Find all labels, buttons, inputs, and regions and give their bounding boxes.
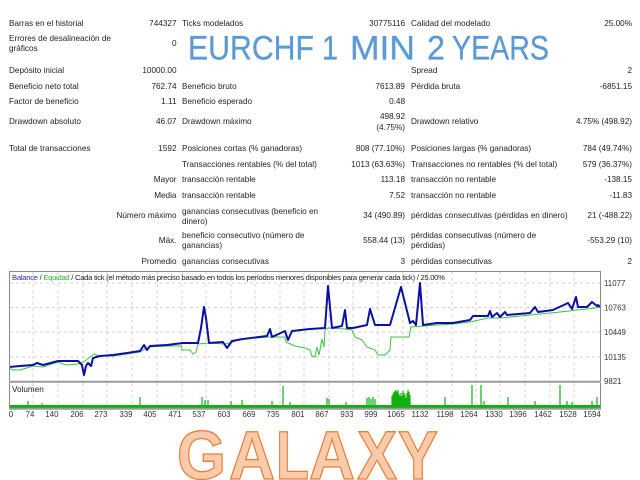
trade count axis: 1132: [412, 410, 428, 419]
price axis: 9821: [604, 377, 622, 386]
balance line: [9, 283, 600, 375]
trade count axis: 603: [217, 410, 231, 419]
row: largest trade: 113.18: [381, 175, 405, 184]
row: maximum consecutive: 34 (490.89): [363, 211, 405, 220]
trade count axis: 1264: [460, 410, 478, 419]
title: EURCHF 1 MIN 2 YEARS: [188, 30, 549, 68]
row: maximum consecutive: pérdidas consecutivas (pérdidas en dinero): [411, 211, 568, 220]
row: initial deposit and spread: [9, 66, 632, 75]
row: total trades: Total de transacciones: [9, 144, 90, 153]
row: max consecutive profit: ganancias): [182, 241, 222, 250]
row: average trade: 7.52: [389, 191, 405, 200]
row: max consecutive profit: 558.44 (13): [363, 236, 405, 245]
row: average consecutive: 2: [627, 257, 632, 266]
row: maximum consecutive: [116, 207, 632, 226]
row: drawdown: 4.75% (498.92): [576, 117, 632, 126]
row: profit factor: 0.48: [389, 97, 405, 106]
row: total trades: 784 (49.74%): [583, 144, 632, 153]
row: largest trade: transacción rentable: [182, 175, 256, 184]
row: average consecutive: Promedio: [141, 257, 177, 266]
row: drawdown: (4.75%): [376, 123, 405, 132]
volume label: Volumen: [12, 385, 44, 394]
row: net profit: Beneficio bruto: [182, 82, 237, 91]
row: max consecutive profit: beneficio consecutivo (número de: [182, 231, 305, 240]
row: average trade: Media: [154, 191, 177, 200]
trade count axis: 1396: [509, 410, 527, 419]
trade count axis: 206: [70, 410, 84, 419]
row: average trade: [154, 191, 632, 200]
row: total trades: Posiciones largas (% ganadoras): [411, 144, 531, 153]
row: history bars, ticks, quality: 30775116: [369, 19, 405, 28]
row: profit factor: Factor de beneficio: [9, 97, 79, 106]
trade count axis: 867: [315, 410, 329, 419]
row: net profit: [9, 82, 632, 91]
trade count axis: 339: [119, 410, 133, 419]
row: average consecutive: ganancias consecutivas: [182, 257, 269, 266]
trade count axis: 1462: [534, 410, 552, 419]
trade count axis: 0: [9, 410, 14, 419]
row: average consecutive: 3: [400, 257, 405, 266]
row: drawdown: Drawdown absoluto: [9, 117, 81, 126]
trade count axis: [9, 410, 601, 419]
title: EURCHF 1 MIN 2 YEARS: 1: [322, 30, 338, 68]
row: profit factor: [9, 97, 405, 106]
trade count axis: 801: [291, 410, 305, 419]
row: max consecutive profit: Máx.: [159, 236, 176, 245]
row: average consecutive: pérdidas consecutivas: [411, 257, 492, 266]
row: history bars, ticks, quality: Ticks modelados: [182, 19, 243, 28]
heading: GALAXY: [177, 417, 438, 480]
price axis: 10763: [604, 304, 627, 312]
trade count axis: 669: [242, 410, 256, 419]
row: history bars, ticks, quality: 744327: [149, 19, 177, 28]
equity line: [9, 307, 600, 370]
chart frame: [10, 272, 600, 408]
row: total trades: [9, 144, 632, 153]
trade count axis: 74: [26, 410, 35, 419]
row: initial deposit and spread: 2: [627, 66, 632, 75]
row: largest trade: transacción no rentable: [411, 175, 497, 184]
row: average consecutive: [141, 257, 632, 266]
row: initial deposit and spread: 10000.00: [142, 66, 177, 75]
row: net profit: 7613.89: [375, 82, 405, 91]
price axis: [604, 279, 627, 386]
trade count axis: 1065: [387, 410, 405, 419]
row: profit factor: Beneficio esperado: [182, 97, 253, 106]
row: max consecutive profit: pérdidas consecutivas (número de: [411, 231, 537, 240]
row: chart errors: Errores de desalineación de: [9, 34, 111, 43]
row: profitable trades: [182, 160, 632, 169]
row: drawdown: [9, 112, 632, 132]
row: average trade: transacción no rentable: [411, 191, 497, 200]
trade count axis: 471: [168, 410, 182, 419]
trade count axis: 999: [364, 410, 378, 419]
chart legend: Balance / Equidad / Cada tick (el método más preciso basado en todos los períodos menores disponibles para generar cada tick) / 25.00%: [12, 273, 445, 282]
row: drawdown: Drawdown máximo: [182, 117, 252, 126]
trade count axis: 1198: [437, 410, 454, 419]
trade count axis: 933: [340, 410, 354, 419]
title: EURCHF 1 MIN 2 YEARS: 2: [427, 30, 445, 68]
trade count axis: 273: [94, 410, 108, 419]
row: profit factor: 1.11: [161, 97, 177, 106]
trade count axis: 1330: [485, 410, 503, 419]
row: total trades: 808 (77.10%): [356, 144, 405, 153]
trade count axis: 1594: [583, 410, 601, 419]
panel dividers: [9, 382, 601, 409]
row: history bars, ticks, quality: Barras en el historial: [9, 19, 84, 28]
row: profitable trades: Transacciones no rentables (% del total): [411, 160, 558, 169]
row: max consecutive profit: [159, 231, 632, 250]
row: net profit: 762.74: [151, 82, 177, 91]
row: average trade: transacción rentable: [182, 191, 256, 200]
row: largest trade: Mayor: [154, 175, 177, 184]
row: profitable trades: Transacciones rentables (% del total): [182, 160, 317, 169]
trade count axis: 735: [266, 410, 280, 419]
row: profitable trades: 1013 (63.63%): [351, 160, 405, 169]
volume bars: [10, 385, 600, 408]
trade count axis: 537: [192, 410, 206, 419]
chart: balance and equity: [9, 272, 627, 419]
title: EURCHF 1 MIN 2 YEARS: YEARS: [452, 30, 549, 68]
price axis: 11077: [604, 279, 625, 288]
row: average trade: -11.83: [609, 191, 632, 200]
row: largest trade: -138.15: [604, 175, 632, 184]
trade count axis: 405: [143, 410, 157, 419]
row: history bars, ticks, quality: [9, 19, 632, 28]
row: drawdown: 46.07: [156, 117, 177, 126]
row: chart errors: gráficos: [9, 44, 38, 53]
report table: [9, 19, 632, 266]
row: history bars, ticks, quality: 25.00%: [604, 19, 632, 28]
row: initial deposit and spread: Spread: [411, 66, 438, 75]
row: initial deposit and spread: Depósito inicial: [9, 66, 64, 75]
row: drawdown: Drawdown relativo: [411, 117, 479, 126]
price axis: 10449: [604, 328, 627, 337]
row: maximum consecutive: 21 (-488.22): [587, 211, 632, 220]
row: maximum consecutive: ganancias consecutivas (beneficio en: [182, 207, 319, 216]
row: net profit: -6851.15: [600, 82, 632, 91]
row: maximum consecutive: Número máximo: [116, 211, 177, 220]
row: net profit: Pérdida bruta: [411, 82, 461, 91]
row: history bars, ticks, quality: Calidad del modelado: [411, 19, 491, 28]
title: EURCHF 1 MIN 2 YEARS: EURCHF: [188, 30, 314, 68]
row: profitable trades: 579 (36.37%): [583, 160, 632, 169]
row: chart errors: 0: [172, 39, 177, 48]
row: total trades: Posiciones cortas (% ganadoras): [182, 144, 302, 153]
row: max consecutive profit: pérdidas): [411, 241, 445, 250]
trade count axis: 140: [45, 410, 59, 419]
title: EURCHF 1 MIN 2 YEARS: MIN: [350, 30, 415, 68]
row: largest trade: [154, 175, 632, 184]
trade count axis: 1528: [559, 410, 577, 419]
row: drawdown: 498.92: [380, 112, 405, 121]
row: chart errors: [9, 34, 177, 53]
price axis: 10135: [604, 353, 627, 362]
row: max consecutive profit: -553.29 (10): [587, 236, 632, 245]
row: net profit: Beneficio neto total: [9, 82, 79, 91]
row: maximum consecutive: dinero): [182, 217, 208, 226]
row: total trades: 1592: [158, 144, 177, 153]
